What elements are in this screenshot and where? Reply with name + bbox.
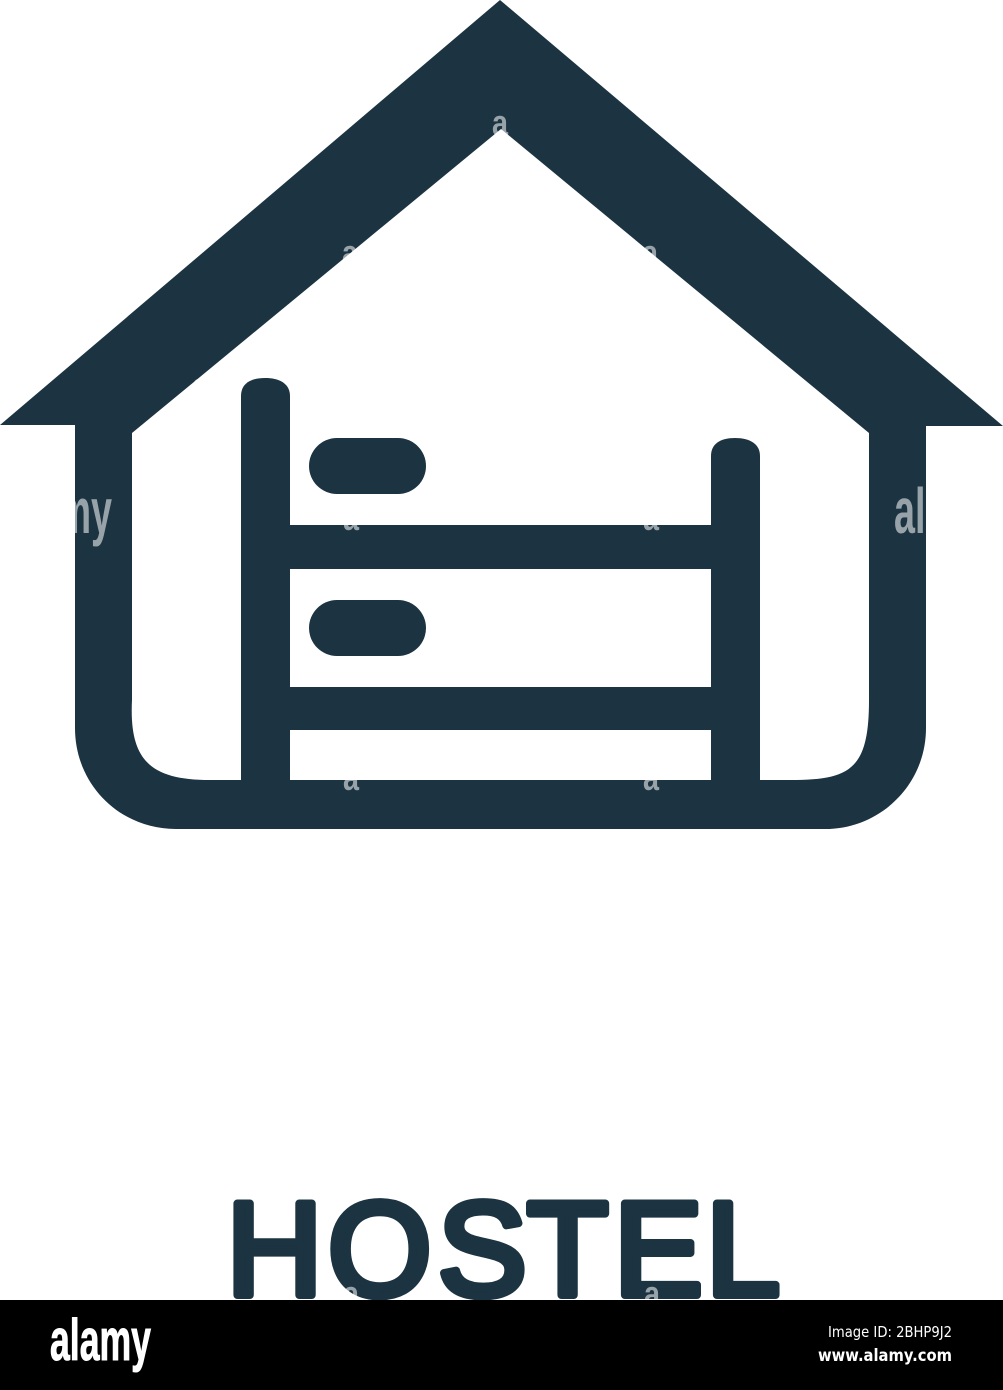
watermark fragments: a bbox=[642, 232, 659, 273]
watermark fragments: a bbox=[643, 757, 660, 798]
site url: www.alamy.com bbox=[818, 1346, 952, 1365]
watermark fragments: a bbox=[792, 365, 809, 406]
title: HOSTEL bbox=[226, 1176, 780, 1324]
icon: bunk bed bbox=[241, 378, 760, 800]
watermark fragments: a bbox=[192, 365, 209, 406]
watermark fragments: alamy bbox=[5, 475, 112, 547]
watermark fragments: a bbox=[643, 497, 660, 538]
watermark fragments: a bbox=[342, 232, 359, 273]
icon: house outline bbox=[0, 0, 1003, 829]
image id: Image ID: 2BHP9J2 bbox=[828, 1323, 952, 1341]
watermark fragments: a bbox=[343, 1273, 360, 1314]
watermark fragments: a bbox=[343, 757, 360, 798]
brand logo: alamy bbox=[50, 1308, 151, 1373]
icon: hostel house with bunk bed bbox=[0, 0, 1003, 829]
watermark fragments: a bbox=[492, 102, 509, 143]
watermark fragments: a bbox=[343, 497, 360, 538]
footer bar bbox=[0, 1300, 1003, 1390]
watermark fragments: a bbox=[644, 1273, 661, 1314]
